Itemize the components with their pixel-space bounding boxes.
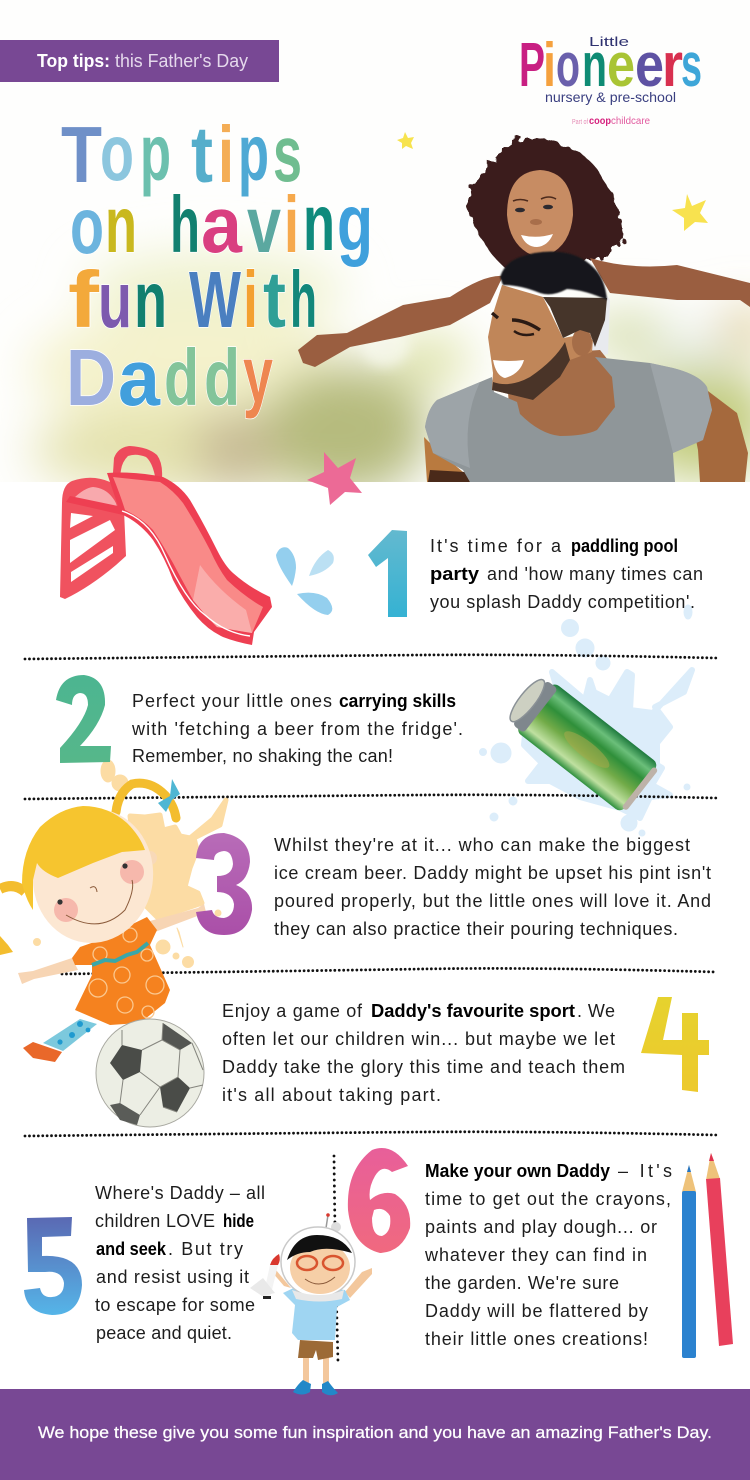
vertical dotted divider	[334, 1156, 338, 1362]
tip 3 text: poured properly, but the little ones will love it. And	[274, 891, 711, 911]
tip 2 text: carrying skills	[339, 691, 456, 711]
logo: Little Pioneers	[519, 31, 702, 127]
tip 5 text: hide	[223, 1211, 254, 1231]
tip 5 text: children LOVE	[95, 1211, 215, 1231]
numeral 6	[348, 1148, 410, 1253]
tip 3 text: they can also practice their pouring techniques.	[274, 919, 678, 939]
boy: helmet	[281, 1227, 355, 1297]
boy: antenna	[326, 1213, 341, 1232]
title: Top tips on having fun with Daddy: g	[337, 178, 373, 267]
logo: Little Pioneers: e	[635, 31, 664, 100]
man: chest and neck	[508, 350, 615, 436]
tip 6 text: Daddy will be flattered by	[425, 1301, 648, 1321]
illustration: girl playing football	[0, 779, 206, 1127]
tip 6 text	[424, 1161, 672, 1349]
boy: collar	[292, 1290, 344, 1302]
man: hair fade	[543, 297, 607, 347]
title: Top tips on having fun with Daddy: p	[238, 108, 269, 197]
child: arms	[298, 258, 750, 367]
title: Top tips on having fun with Daddy: W	[189, 255, 241, 344]
man: grey t-shirt	[425, 357, 712, 482]
title: Top tips on having fun with Daddy: d	[164, 333, 199, 422]
girl: blue bow	[158, 779, 180, 812]
tip 6 text: Make your own Daddy	[425, 1161, 610, 1181]
tip 5 text	[95, 1183, 265, 1343]
header tag: top tips	[0, 40, 279, 82]
man: sleeves	[425, 363, 712, 468]
icon: red slide	[60, 446, 272, 645]
girl: head	[24, 801, 162, 951]
numeral 5	[24, 1217, 82, 1315]
title: Top tips on having fun with Daddy: t	[191, 110, 213, 199]
title: Top tips on having fun with Daddy: o	[70, 181, 104, 270]
tip 6 text: the garden. We're sure	[425, 1273, 619, 1293]
tip 5 text: and seek	[96, 1239, 167, 1259]
icon: water drops	[276, 547, 334, 615]
title: Top tips on having fun with Daddy: i	[284, 180, 299, 269]
girl: right arm	[150, 904, 206, 932]
icon: pink star	[307, 452, 362, 505]
girl: face details	[54, 860, 144, 924]
man: arms	[424, 385, 748, 482]
slide: handle	[113, 446, 162, 478]
girl: dress swirls	[89, 928, 164, 1018]
girl: ears	[143, 851, 157, 865]
divider lines	[25, 655, 716, 1136]
boy: toy rocket	[250, 1254, 280, 1299]
tip 1 text: you splash Daddy competition'.	[430, 592, 695, 612]
boy: shorts	[298, 1340, 333, 1360]
tip 5 text: . But try	[168, 1239, 243, 1259]
tip 5 text: to escape for some	[95, 1295, 255, 1315]
tip 2 text: with 'fetching a beer from the fridge'.	[131, 719, 463, 739]
tip 6 text: whatever they can find in	[424, 1245, 647, 1265]
logo: Little Pioneers: Little	[589, 34, 629, 49]
numeral 3	[196, 833, 252, 935]
boy: shoes	[293, 1380, 311, 1394]
tip 4 text: often let our children win... but maybe we let	[222, 1029, 615, 1049]
tip 1 text	[430, 536, 703, 612]
logo: Little Pioneers: childcare	[611, 116, 650, 127]
girl: lower pigtail end	[0, 936, 13, 955]
girl: shoe	[23, 1042, 62, 1062]
title: Top tips on having fun with Daddy: v	[247, 180, 281, 269]
title: Top tips on having fun with Daddy: T	[61, 110, 102, 199]
tip 2 text	[131, 691, 463, 766]
title: Top tips on having fun with Daddy: s	[273, 109, 302, 198]
numeral 2	[56, 675, 111, 763]
logo: Little Pioneers: s	[681, 31, 702, 100]
tip 5 text: Where's Daddy – all	[95, 1183, 265, 1203]
logo: Little Pioneers: Part of	[572, 119, 588, 126]
title: Top tips on having fun with Daddy: h	[290, 255, 317, 344]
boy: blue shirt	[283, 1285, 350, 1340]
title: Top tips on having fun with Daddy: o	[100, 108, 134, 197]
slide: gaps between rungs	[70, 513, 115, 582]
football	[96, 1019, 204, 1127]
title: Top tips on having fun with Daddy: y	[243, 330, 273, 419]
title: Top tips on having fun with Daddy: f	[68, 255, 99, 344]
tip 4 text: Daddy's favourite sport	[371, 1001, 575, 1021]
peach paint splash	[34, 760, 226, 968]
title: Top tips on having fun with Daddy: a	[118, 333, 160, 422]
tip 6 text: their little ones creations!	[425, 1329, 648, 1349]
icon: blue pencil	[682, 1165, 696, 1358]
title: Top tips on having fun with Daddy: i	[243, 255, 258, 344]
boy: legs	[303, 1355, 309, 1385]
tip 1 text: It's time for a	[430, 536, 562, 556]
tip 3 text: Whilst they're at it... who can make the biggest	[274, 835, 690, 855]
tip 4 text: Daddy take the glory this time and teach them	[222, 1057, 625, 1077]
tip 4 text: it's all about taking part.	[222, 1085, 441, 1105]
logo: Little Pioneers: n	[582, 31, 607, 100]
logo: Little Pioneers: e	[607, 31, 635, 100]
tip 1 text: party	[430, 564, 479, 584]
title: Top tips on having fun with Daddy: a	[201, 180, 242, 269]
tip 2 text: Remember, no shaking the can!	[132, 746, 393, 766]
icon: large yellow star	[672, 194, 708, 231]
logo: Little Pioneers: coop	[589, 116, 611, 127]
logo: Little Pioneers: i	[543, 31, 556, 100]
child: hair	[465, 137, 622, 268]
tip 1 text: and 'how many times can	[487, 564, 703, 584]
icon: red pencil	[706, 1153, 733, 1346]
tip 1 text: paddling pool	[571, 536, 678, 556]
boy: left arm	[272, 1270, 291, 1288]
man: face	[488, 285, 593, 400]
numeral 1	[368, 530, 407, 617]
blurred garden background	[8, 228, 750, 482]
logo: Little Pioneers: P	[519, 31, 545, 100]
slide: highlight	[122, 511, 250, 636]
icon: small yellow star	[397, 132, 414, 149]
girl: yellow hair	[22, 806, 145, 910]
numeral 4	[641, 997, 709, 1092]
icon: green beer can	[502, 671, 661, 815]
logo: Little Pioneers: nursery & pre-school	[545, 89, 676, 105]
boy: face and hair	[287, 1235, 352, 1294]
slide: hood	[73, 487, 117, 508]
tip 6 text: time to get out the crayons,	[425, 1189, 671, 1209]
title: Top tips on having fun with Daddy: h	[170, 180, 200, 269]
girl: orange dress	[72, 917, 170, 1025]
tip 4 text	[222, 1001, 625, 1105]
slide: ladder frame	[60, 478, 126, 599]
girl: left pigtail	[0, 886, 25, 892]
tip 4 text: Enjoy a game of	[222, 1001, 363, 1021]
footer band	[0, 1389, 750, 1480]
title: Top tips on having fun with Daddy: n	[303, 178, 335, 267]
illustration: astronaut boy	[250, 1213, 372, 1395]
tip 3 text	[274, 835, 711, 939]
child: face	[507, 170, 573, 258]
tip 2 text: Perfect your little ones	[132, 691, 332, 711]
title: Top tips on having fun with Daddy: D	[66, 333, 116, 422]
title: Top tips on having fun with Daddy: n	[105, 180, 137, 269]
blue paint splash	[480, 605, 692, 836]
title: Top tips on having fun with Daddy: u	[98, 255, 132, 344]
title: Top tips on having fun with Daddy: i	[218, 110, 234, 199]
footer band: We hope these give you some fun inspiration and you have an amazing Father's Day.	[38, 1423, 712, 1442]
slide: chute surface	[113, 477, 263, 633]
title: Top tips on having fun with Daddy	[61, 108, 373, 422]
logo: Little Pioneers: r	[662, 31, 683, 100]
tip 6 text: paints and play dough... or	[425, 1217, 657, 1237]
girl: top pigtail	[116, 783, 176, 818]
tip 6 text: – It's	[618, 1161, 672, 1181]
tip 5 text: and resist using it	[96, 1267, 249, 1287]
logo: Little Pioneers: o	[556, 31, 580, 100]
boy: right arm	[345, 1268, 372, 1298]
title: Top tips on having fun with Daddy: n	[134, 255, 167, 344]
title: Top tips on having fun with Daddy: p	[140, 108, 171, 197]
title: Top tips on having fun with Daddy: d	[204, 333, 240, 422]
tip 4 text: . We	[577, 1001, 615, 1021]
girl: left arm	[18, 958, 78, 984]
tip 3 text: ice cream beer. Daddy might be upset his pint isn't	[274, 863, 711, 883]
title: Top tips on having fun with Daddy: t	[263, 255, 286, 344]
child: white shirt	[592, 296, 610, 355]
slide: chute rim	[66, 472, 272, 645]
header tag: top tips: Top tips:	[37, 51, 110, 71]
header tag: top tips: this Father's Day	[115, 51, 248, 71]
girl: dress trim	[92, 943, 148, 965]
girl: leg	[43, 1019, 97, 1051]
man: hair	[500, 252, 607, 300]
tip 5 text: peace and quiet.	[96, 1323, 232, 1343]
hero photo: father carrying daughter	[8, 135, 750, 482]
